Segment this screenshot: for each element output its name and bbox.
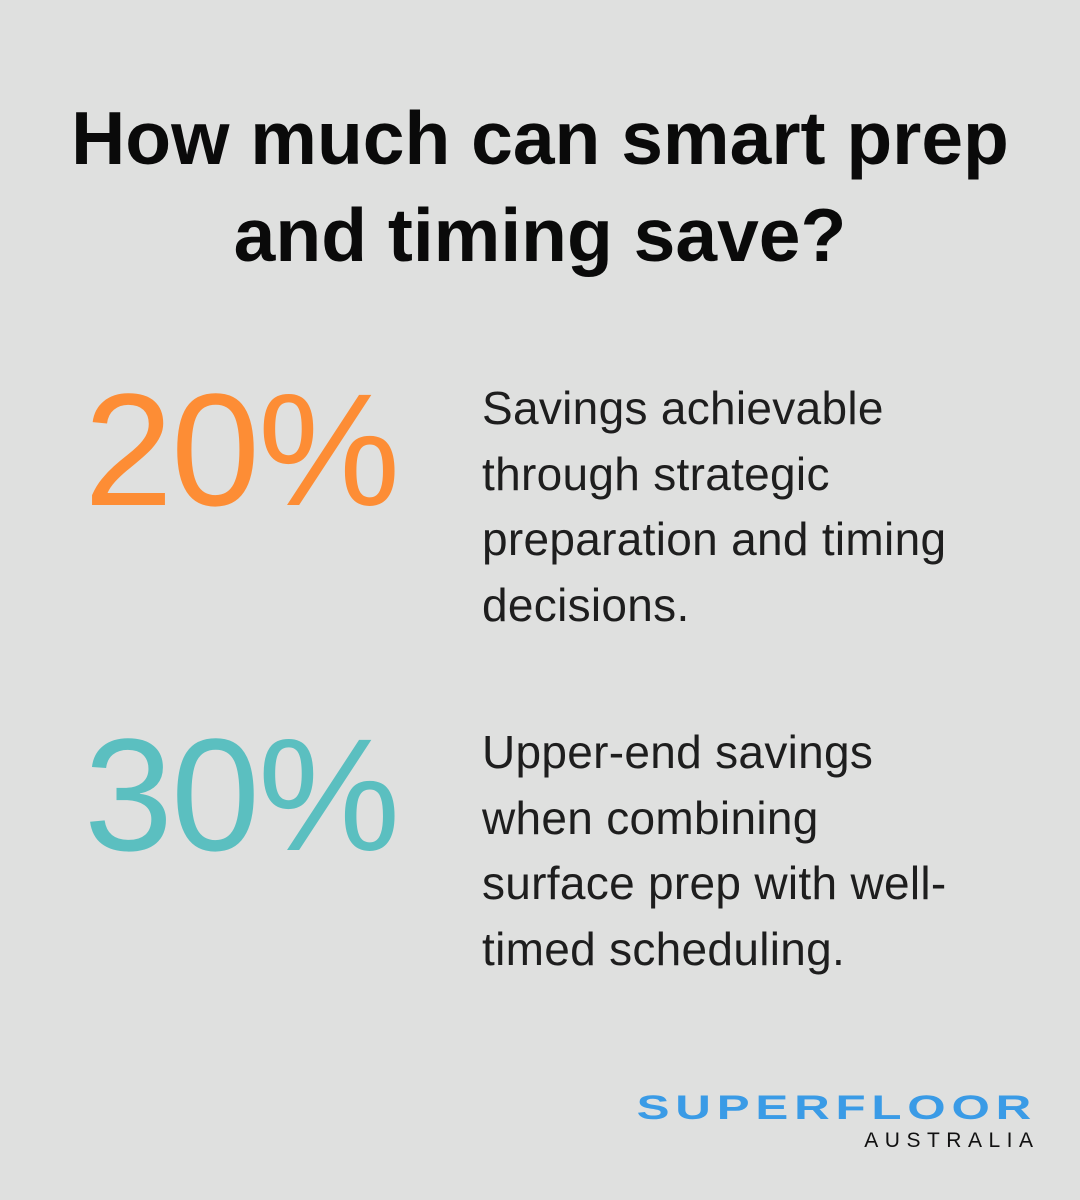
stat 2 description bbox=[482, 726, 947, 974]
stat 1: 20%: 20% bbox=[84, 360, 398, 539]
stat 2 description: Upper-end savings bbox=[482, 726, 873, 778]
stat 1 description bbox=[482, 382, 946, 630]
title: and timing save? bbox=[234, 193, 846, 277]
stat 1 description: through strategic bbox=[482, 448, 830, 500]
title bbox=[71, 96, 1009, 277]
stat 1 description: preparation and timing bbox=[482, 513, 946, 565]
stat 2: 30%: 30% bbox=[84, 705, 398, 884]
title: How much can smart prep bbox=[71, 96, 1009, 180]
logo: SUPERFLOOR bbox=[637, 1089, 1037, 1127]
stat 2 description: surface prep with well- bbox=[482, 857, 947, 909]
stat 2 description: when combining bbox=[482, 792, 819, 844]
logo: AUSTRALIA bbox=[864, 1129, 1040, 1152]
stat 2 description: timed scheduling. bbox=[482, 922, 845, 974]
logo bbox=[637, 1089, 1040, 1152]
stat 1 description: decisions. bbox=[482, 578, 690, 630]
stat 1 description: Savings achievable bbox=[482, 382, 884, 434]
